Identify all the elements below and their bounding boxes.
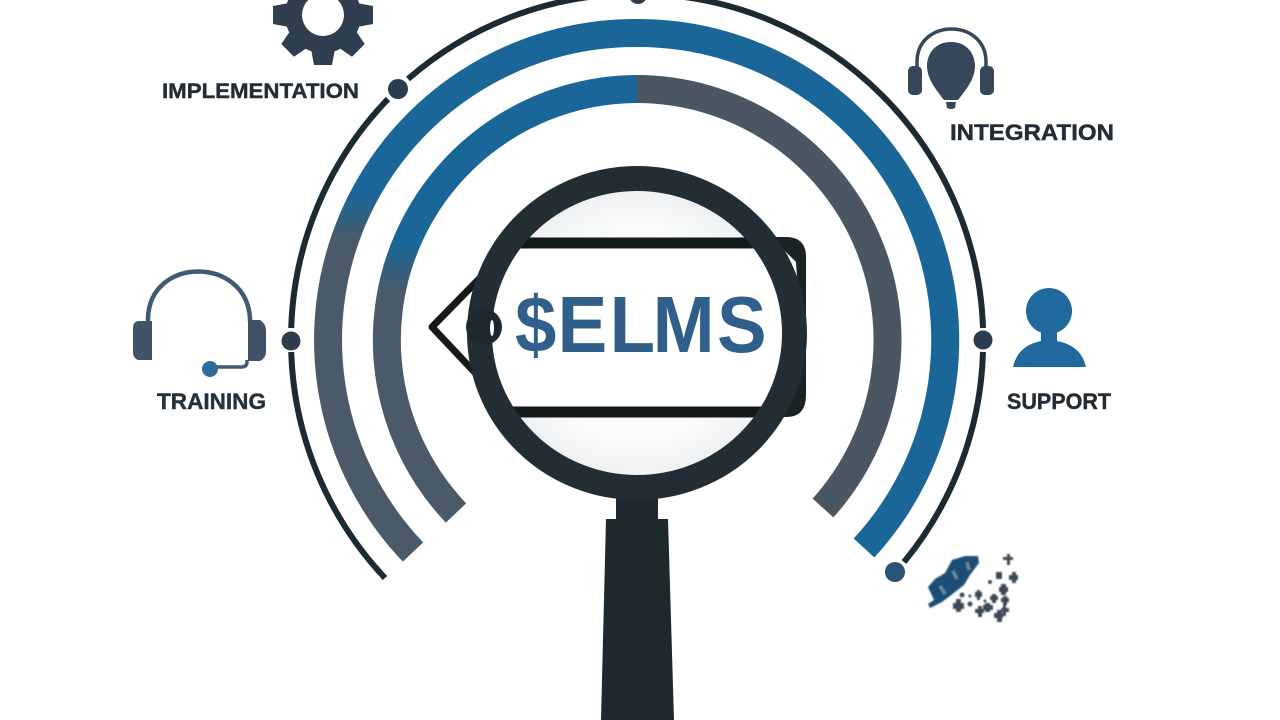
magnifying glass handle	[601, 490, 674, 720]
middle blue arc	[328, 33, 945, 552]
lens interior	[513, 191, 782, 475]
icon: headset with microphone	[133, 272, 266, 377]
scattered puzzle pieces	[928, 554, 1018, 622]
tag hole	[466, 309, 502, 345]
inner blue and gray arc	[387, 89, 888, 513]
icon: person	[1013, 288, 1086, 367]
label: implementation: IMPLEMENTATION	[162, 80, 359, 103]
lens ring	[480, 178, 794, 488]
icon: headset with bulb	[908, 29, 994, 109]
lens label: $ELMS	[515, 281, 767, 370]
label: training: TRAINING	[157, 389, 266, 414]
outer thin ring with milestone dots	[282, 0, 992, 582]
icon: gear	[273, 0, 373, 65]
label: integration: INTEGRATION	[950, 120, 1114, 145]
label: support: SUPPORT	[1007, 389, 1112, 414]
price tag behind lens	[432, 237, 806, 417]
